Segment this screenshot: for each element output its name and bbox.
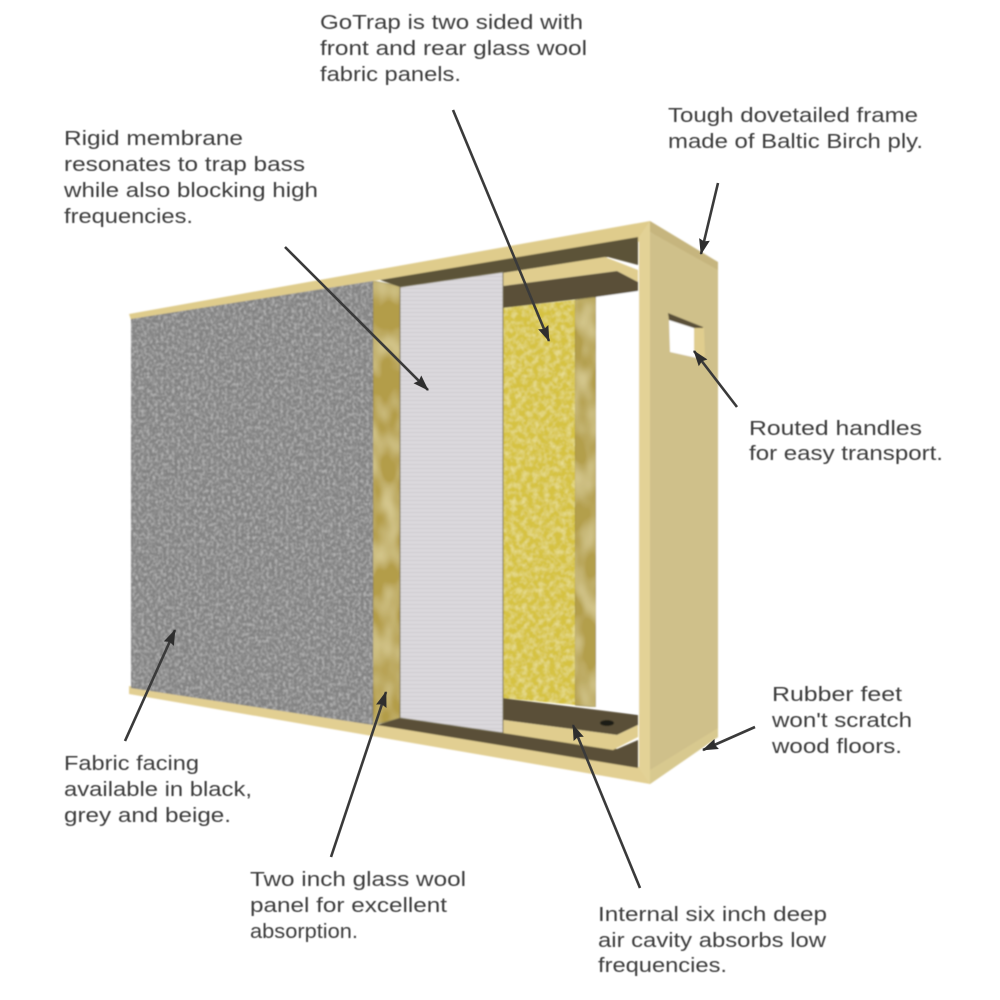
text block: routed handles: Routed handles [749, 417, 922, 440]
text block: rubber feet: Rubber feet [772, 683, 902, 706]
text block: rubber feet: wood floors. [771, 735, 902, 758]
text block: rubber feet [771, 683, 912, 758]
panel: bottom frame rail [129, 686, 650, 784]
text block: dovetailed frame: Tough dovetailed frame [668, 104, 918, 127]
text block: fabric facing: Fabric facing [64, 752, 199, 775]
text block: air cavity: air cavity absorbs low [598, 929, 826, 952]
arrow: glass wool panel [331, 692, 386, 857]
arrow: rubber feet [703, 727, 755, 750]
panel: top frame rail [129, 221, 650, 320]
text block: glass wool panel [250, 868, 466, 943]
panel: rear wood stud [575, 297, 596, 707]
text block: rigid membrane [63, 127, 318, 228]
text block: air cavity: Internal six inch deep [598, 903, 827, 926]
text block: fabric facing: available in black, [64, 778, 252, 801]
text block: glass wool panel: panel for excellent [250, 894, 447, 917]
panel: bottom cavity interior [377, 718, 638, 768]
icon: routed handle cutout [668, 313, 705, 358]
text block: glass wool panel: absorption. [250, 920, 358, 943]
text block: glass wool panel: Two inch glass wool [250, 868, 466, 891]
panel: upper shelf [503, 257, 638, 308]
panel: side wood stud near fabric [373, 281, 400, 725]
arrow: routed handles [694, 351, 737, 407]
text block: rigid membrane: frequencies. [64, 205, 193, 228]
icon: foot hole [600, 720, 614, 726]
panel: rigid membrane [400, 272, 503, 733]
arrow: GoTrap two sided [453, 110, 549, 341]
text block: rubber feet: won't scratch [771, 709, 912, 732]
text block: air cavity [598, 903, 827, 977]
panel: air cavity opening [596, 291, 639, 714]
text block: rigid membrane: while also blocking high [63, 179, 318, 202]
panel: top cavity interior [380, 237, 638, 287]
panel: right side panel [639, 221, 718, 784]
arrow: rigid membrane [285, 247, 428, 390]
text block: GoTrap two sided [320, 11, 587, 86]
text block: dovetailed frame: made of Baltic Birch ply. [668, 130, 923, 153]
text block: fabric facing: grey and beige. [64, 804, 231, 827]
panel: acoustic trap cutaway illustration [129, 221, 718, 784]
panel: fabric facing [131, 281, 373, 725]
text block: dovetailed frame [668, 104, 923, 153]
text block: air cavity: frequencies. [598, 954, 727, 977]
text block: GoTrap two sided: GoTrap is two sided with [320, 11, 583, 34]
text block: GoTrap two sided: fabric panels. [320, 63, 461, 86]
text block: rigid membrane: Rigid membrane [64, 127, 243, 150]
arrow: dovetailed frame [701, 183, 718, 254]
text block: routed handles [749, 417, 943, 465]
text block: routed handles: for easy transport. [749, 442, 943, 465]
text block: rigid membrane: resonates to trap bass [64, 153, 305, 176]
panel: rear glass wool [503, 300, 575, 705]
arrow: fabric facing [125, 630, 175, 741]
panel: lower shelf [503, 698, 638, 750]
text block: GoTrap two sided: front and rear glass wool [320, 37, 587, 60]
text block: fabric facing [64, 752, 252, 827]
arrow: air cavity [573, 725, 640, 888]
